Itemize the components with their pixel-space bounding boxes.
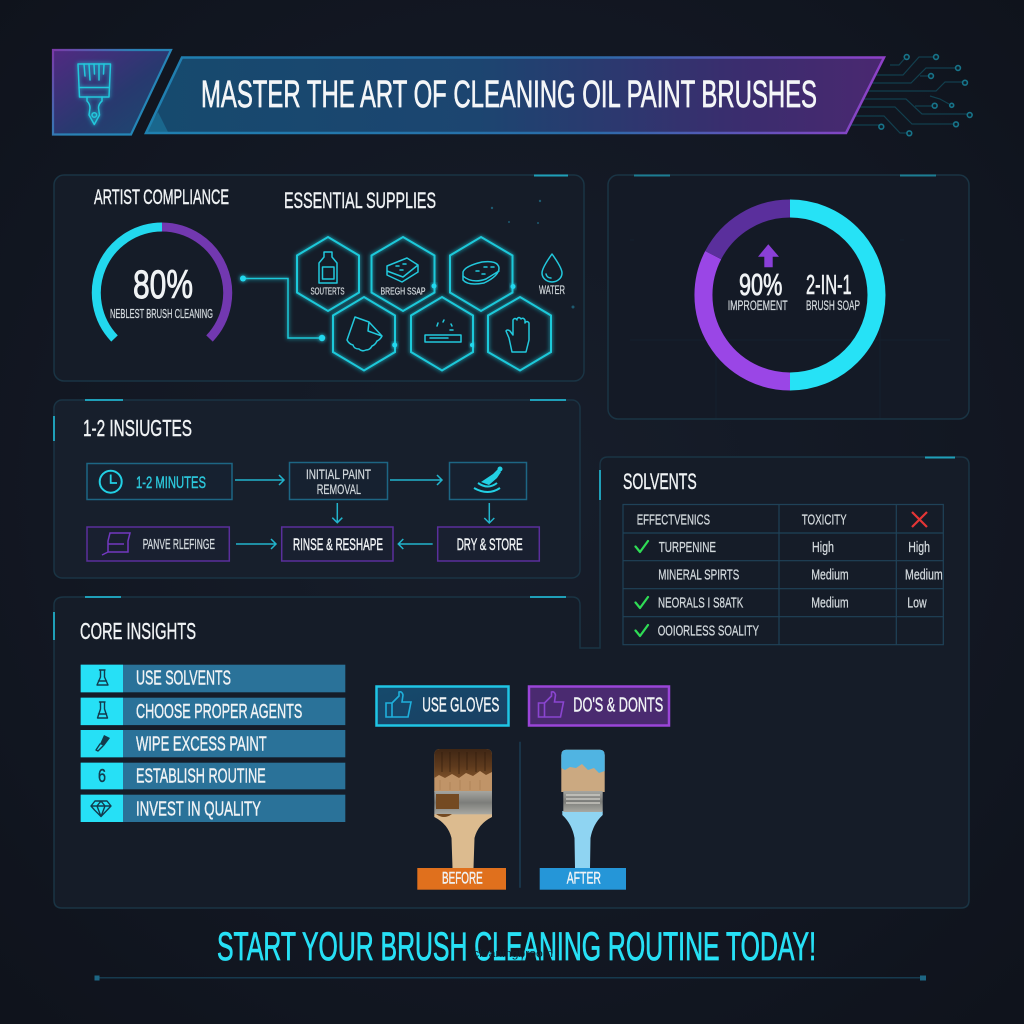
- heading: artist compliance: ARTIST COMPLIANCE: [94, 186, 229, 209]
- table row: turpenine: [636, 540, 930, 556]
- icon: brush soap hexagon: [372, 237, 436, 311]
- table row: neorals: Medium: [811, 596, 849, 612]
- chart: 80% gauge: [96, 227, 228, 338]
- stat: 2-in-1 brush soap: [806, 269, 860, 313]
- icon: brush soap hexagon: BREGH SSAP: [380, 286, 426, 298]
- label: before: [417, 868, 506, 890]
- table row: neorals: [636, 596, 927, 612]
- table header row: TOXICITY: [802, 511, 847, 528]
- illustration: after brush: [540, 750, 626, 890]
- table row: neorals: Low: [907, 596, 927, 612]
- chart: donut ring: [703, 208, 876, 382]
- stat: 2-in-1 brush soap: 2-IN-1: [806, 269, 852, 300]
- stat: 90% improvement: [728, 267, 788, 313]
- background specks: [491, 200, 574, 308]
- icon: soap bar hexagon: [450, 237, 516, 311]
- panel: donut: [608, 174, 969, 419]
- heading: core insights: CORE INSIGHTS: [80, 618, 196, 644]
- table row: mineral spirits: Medium: [811, 568, 849, 584]
- insight: invest in quality: [81, 795, 345, 822]
- watermark text: cleaningbroom: [473, 948, 553, 960]
- step: initial paint removal: INITIAL PAINT: [306, 466, 371, 482]
- insight: choose proper agents: CHOOSE PROPER AGENTS: [136, 700, 302, 723]
- insight: invest in quality: INVEST IN QUALITY: [136, 797, 261, 820]
- heading: insights: 1-2 INSIUGTES: [83, 415, 192, 441]
- arrow: [236, 539, 276, 549]
- chart: 80% gauge: NEBLEST BRUSH CLEANING: [110, 307, 213, 321]
- table row: turpenine: High: [812, 540, 834, 556]
- panel: process flow: [53, 399, 580, 578]
- table row: turpenine: TURPENINE: [659, 540, 716, 556]
- table row: mineral spirits: MINERAL SPIRTS: [658, 568, 739, 584]
- arrow: [390, 475, 442, 485]
- footer line: [94, 976, 926, 980]
- icon: water: WATER: [539, 285, 565, 297]
- step: rinse and reshape: RINSE & RESHAPE: [293, 536, 383, 554]
- icon: glove hexagon: [488, 297, 551, 370]
- arrow down: [332, 503, 342, 523]
- button: dos and donts: [529, 686, 669, 726]
- stat: 2-in-1 brush soap: BRUSH SOAP: [806, 298, 860, 313]
- table row: odorless: [636, 624, 759, 640]
- panel: core insights: [53, 596, 969, 908]
- chart: 80% gauge: 80%: [133, 263, 193, 307]
- table row: mineral spirits: [658, 568, 943, 584]
- table grid: [623, 504, 943, 645]
- table header row: EFFECTVENICS: [637, 511, 710, 528]
- heading: essential supplies: ESSENTIAL SUPPLIES: [284, 188, 436, 213]
- button: use gloves: [376, 686, 508, 726]
- icon: solvents hexagon: SOUTERTS: [310, 286, 344, 298]
- divider: [519, 742, 521, 888]
- panel: solvents table: [599, 456, 969, 648]
- stat: 90% improvement: IMPROEMENT: [728, 298, 788, 313]
- label: before: BEFORE: [442, 870, 483, 888]
- icon: water: [539, 254, 565, 297]
- insight: use solvents: USE SOLVENTS: [136, 667, 231, 690]
- table row: mineral spirits: Medium: [905, 568, 943, 584]
- step: initial paint removal: REMOVAL: [317, 481, 361, 497]
- connector line: [240, 276, 325, 341]
- icon: palette knife hexagon: [411, 297, 474, 370]
- step: rinse and reshape: [282, 527, 393, 561]
- insight: use solvents: [81, 665, 345, 692]
- step: initial paint removal: [290, 462, 388, 500]
- title banner: [146, 58, 884, 133]
- circuit decoration: [850, 55, 972, 136]
- illustration: before brush: [417, 749, 506, 890]
- insight: establish routine: ESTABLISH ROUTINE: [136, 765, 266, 788]
- arrow: [235, 475, 284, 485]
- step: 1-2 minutes: [87, 464, 232, 500]
- label: after: AFTER: [567, 870, 601, 888]
- table header row: [637, 511, 927, 528]
- table row: neorals: NEORALS I S8ATK: [658, 596, 744, 612]
- stat: 90% improvement: 90%: [739, 267, 782, 302]
- heading: solvents: SOLVENTS: [623, 469, 697, 494]
- table row: odorless: OOIORLESS SOALITY: [658, 624, 759, 640]
- icon: rag hexagon: [333, 297, 397, 370]
- table row: turpenine: High: [908, 540, 930, 556]
- button: use gloves: USE GLOVES: [422, 695, 499, 717]
- arrow left: [398, 539, 433, 549]
- icon panel: paintbrush badge: [53, 50, 171, 134]
- background grid: [630, 240, 950, 419]
- step: swirl icon: [450, 462, 526, 500]
- panel: artist compliance and essential supplies: [54, 174, 584, 381]
- insight: choose proper agents: [81, 698, 345, 725]
- icon: paintbrush: [78, 64, 110, 124]
- step: dry and store: [438, 527, 539, 561]
- step: paint refinge: [87, 527, 229, 561]
- insight: establish routine: 6: [98, 766, 106, 786]
- combined panel outline: [54, 457, 969, 908]
- insight: wipe excess paint: WIPE EXCESS PAINT: [136, 733, 267, 756]
- arrow down: [484, 503, 494, 523]
- icon: up arrow: [758, 244, 779, 267]
- step: paint refinge: PANVE RLEFINGE: [143, 537, 215, 553]
- button: dos and donts: DO'S & DONTS: [573, 695, 663, 717]
- insight: establish routine: [81, 763, 345, 789]
- icon: solvents hexagon: [297, 237, 359, 311]
- step: 1-2 minutes: 1-2 MINUTES: [136, 473, 206, 492]
- insight: wipe excess paint: [81, 730, 345, 757]
- step: dry and store: DRY & STORE: [457, 536, 523, 554]
